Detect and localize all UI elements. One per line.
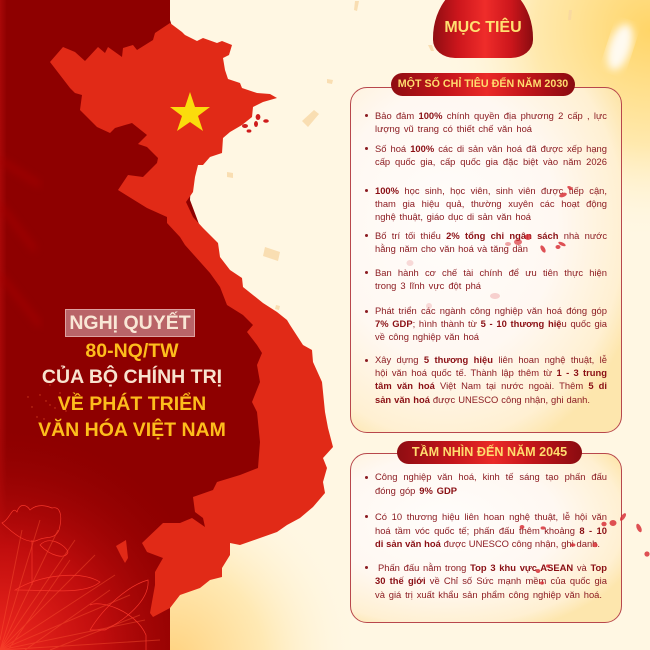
list: 2030 targets: lượng vũ trang có thiết chế văn hoá: [375, 123, 532, 134]
list: 2045 vision: 30 thế giới về Chỉ số Sức mạnh mềm của quốc gia: [375, 575, 607, 586]
list: 2030 targets: sản văn hoá được UNESCO công nhận, ghi danh.: [375, 394, 590, 405]
list: 2030 targets: Bố trí tối thiểu 2% tổng chi ngân sách nhà nước: [375, 230, 607, 241]
list: 2045 vision: hoá tầm vóc quốc tế; phấn đấu thêm khoảng 8 - 10: [375, 525, 607, 536]
list: 2030 targets: hằng năm cho văn hoá và tăng dần: [375, 243, 528, 254]
list: 2030 targets: 100% học sinh, học viên, sinh viên được tiếp cận,: [375, 185, 607, 196]
title: number: 80-NQ/TW: [85, 340, 179, 362]
list: 2030 targets: Phát triển các ngành công nghiệp văn hoá đóng góp: [375, 305, 607, 316]
panel heading: 2045: [397, 441, 582, 464]
panel: vision to 2045: [350, 453, 622, 623]
title: issuer: CỦA BỘ CHÍNH TRỊ: [42, 366, 222, 388]
list: 2045 vision: Phấn đấu nằm trong Top 3 khu vực ASEAN và Top: [378, 562, 607, 573]
list: 2030 targets: tâm văn hoá Việt Nam tại nước ngoài. Thêm 5 di: [375, 380, 607, 391]
panel heading: 2045: TẦM NHÌN ĐẾN NĂM 2045: [412, 445, 567, 459]
list: 2030 targets: trong 3 lĩnh vực đột phá: [375, 280, 481, 291]
title block: [38, 309, 226, 441]
panel: targets to 2030: [350, 87, 622, 433]
list: 2045 vision: di sản văn hoá được UNESCO công nhận, ghi danh.: [375, 538, 600, 549]
list: 2030 targets: Số hoá 100% các di sản văn hoá đã được xếp hạng: [375, 143, 607, 154]
list: 2030 targets: cấp quốc gia, cấp quốc gia đặc biệt vào năm 2026: [375, 156, 607, 167]
panel heading: 2030: [391, 73, 575, 96]
list: 2045 vision: đóng góp 9% GDP: [375, 485, 457, 496]
title: Nghị quyết badge: NGHỊ QUYẾT: [69, 312, 191, 334]
list: 2030 targets: 7% GDP; hình thành từ 5 - 10 thương hiệu quốc gia: [375, 318, 607, 329]
list: 2030 targets: nghệ thuật, giáo dục di sản văn hoá: [375, 211, 531, 222]
list: 2045 vision: Công nghiệp văn hoá, kinh tế sáng tạo phấn đấu: [375, 471, 607, 482]
list: 2030 targets: hội văn hoá quốc tế. Thành lập thêm từ 1 - 3 trung: [375, 367, 607, 378]
heading tab: Mục tiêu: [433, 0, 533, 58]
list: 2030 targets: Ban hành cơ chế tài chính để ưu tiên thực hiện: [375, 267, 607, 278]
list: 2045 vision: [365, 471, 607, 600]
heading tab: Mục tiêu: MỤC TIÊU: [444, 19, 522, 36]
title: topic line 1: VỀ PHÁT TRIỂN: [58, 393, 206, 415]
lotus and light rays decoration: [0, 505, 160, 650]
firework dots: [27, 384, 67, 424]
small island: [116, 540, 128, 563]
islands: [242, 114, 269, 133]
list: 2045 vision: Có 10 thương hiệu liên hoan nghệ thuật, lễ hội văn: [375, 511, 607, 522]
list: 2045 vision: và giá trị xuất khẩu sản phẩm công nghiệp văn hoá.: [375, 589, 602, 600]
panel heading: 2030: MỘT SỐ CHỈ TIÊU ĐẾN NĂM 2030: [398, 78, 568, 90]
title: topic line 2: VĂN HÓA VIỆT NAM: [38, 419, 226, 441]
list: 2030 targets: [365, 110, 607, 405]
list: 2030 targets: về công nghiệp văn hoá: [375, 331, 479, 342]
list: 2030 targets: Xây dựng 5 thương hiệu liên hoan nghệ thuật, lễ: [375, 354, 607, 365]
list: 2030 targets: Bảo đảm 100% chính quyền địa phương 2 cấp , lực: [375, 110, 607, 121]
list: 2030 targets: tham gia hiệu quả, thường xuyên các hoạt động: [375, 198, 607, 209]
star: [170, 92, 210, 131]
